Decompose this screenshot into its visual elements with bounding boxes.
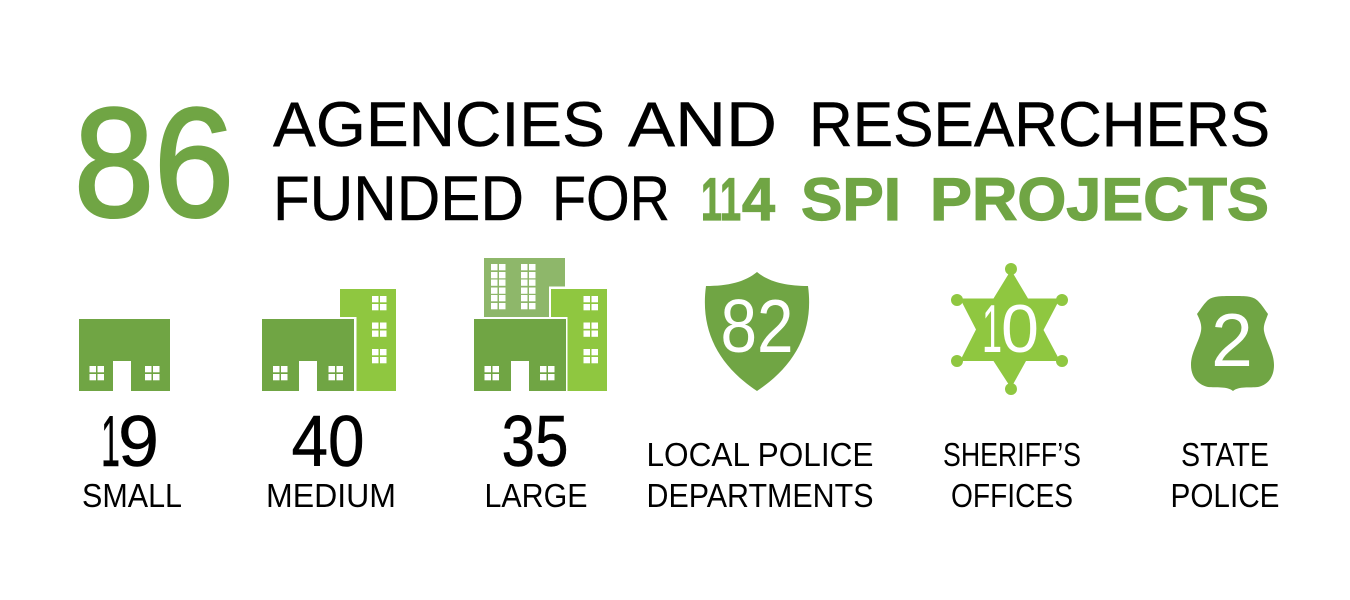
big number 86: 86 <box>74 76 234 249</box>
label: sheriff's offices <box>943 436 1081 514</box>
label: state police: STATE <box>1181 436 1269 473</box>
headline highlight: 114 SPI projects <box>701 166 1269 233</box>
icon: state police badge with 2: 2 <box>1211 298 1253 382</box>
icon: police shield with 82: 82 <box>720 284 794 368</box>
headline line 1: AND <box>628 90 777 160</box>
label: local police departments: DEPARTMENTS <box>646 477 874 514</box>
label: local police departments <box>646 436 874 514</box>
stat: 19 small: SMALL <box>82 477 182 514</box>
headline line 1 <box>273 90 1270 234</box>
headline line 1: AGENCIES <box>273 90 605 160</box>
stat: 35 large: 35 <box>502 402 568 482</box>
icon: sheriff star with 10: 0 <box>1001 291 1039 367</box>
stat: 35 large <box>484 402 588 514</box>
headline highlight: 114 SPI projects: PROJECTS <box>930 166 1269 233</box>
label: local police departments: LOCAL POLICE <box>646 436 874 473</box>
headline <box>273 90 1270 234</box>
stat: 40 medium <box>266 402 396 514</box>
headline line 1: FOR <box>552 164 670 234</box>
stat: 35 large: LARGE <box>484 477 588 514</box>
stat: 40 medium: MEDIUM <box>266 477 396 514</box>
icon: large agency buildings <box>474 258 607 391</box>
icon: small agency building <box>79 319 170 391</box>
icon: state police badge with 2 <box>1191 296 1274 391</box>
icon: medium agency buildings <box>262 289 396 391</box>
label: state police <box>1170 436 1280 514</box>
headline highlight: 114 SPI projects: 4 <box>742 166 776 233</box>
label: sheriff's offices: OFFICES <box>951 477 1073 514</box>
stat: 19 small <box>82 402 182 514</box>
headline line 1: FUNDED <box>273 164 524 234</box>
stat: 19 small: 1 <box>101 402 120 482</box>
headline line 1: RESEARCHERS <box>809 90 1270 160</box>
headline highlight: 114 SPI projects: SPI <box>801 166 901 233</box>
label: sheriff's offices: SHERIFF’S <box>943 436 1081 473</box>
icon: sheriff star with 10: 1 <box>982 291 1002 367</box>
label: state police: POLICE <box>1170 477 1280 514</box>
icon: sheriff star with 10 <box>951 263 1068 395</box>
headline highlight: 114 SPI projects: 11 <box>701 166 741 233</box>
stat: 19 small: 9 <box>118 402 159 482</box>
icon: police shield with 82 <box>705 272 809 391</box>
stat: 40 medium: 40 <box>292 402 364 482</box>
